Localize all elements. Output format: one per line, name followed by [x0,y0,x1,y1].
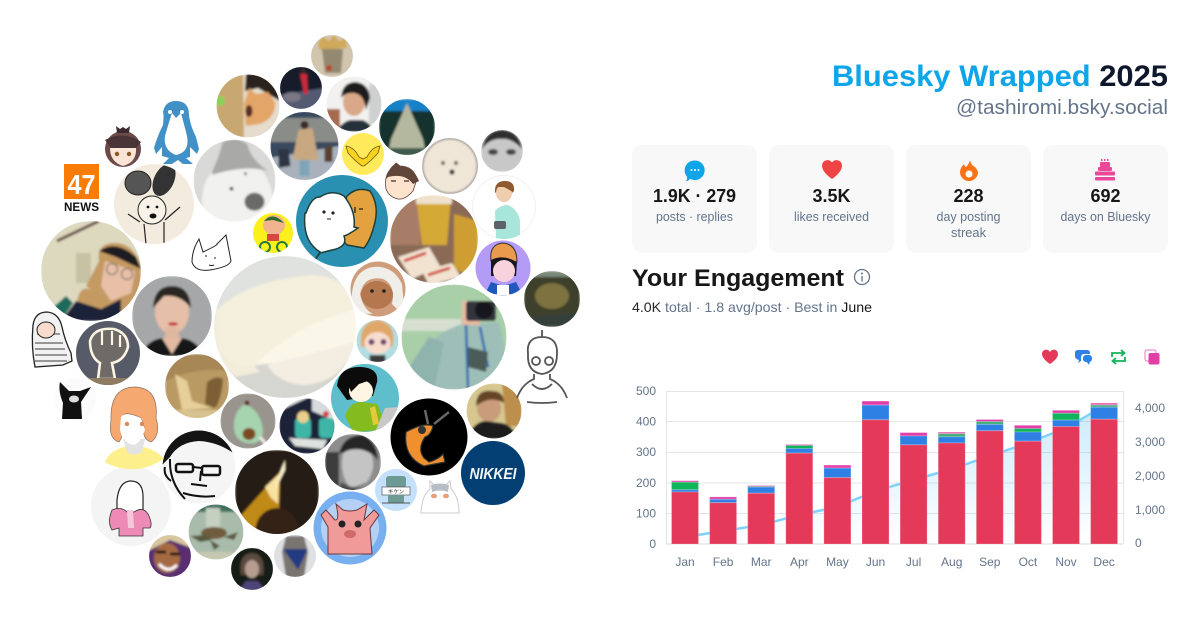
avatar cluster [32,34,580,591]
bar: Apr [786,444,813,544]
bar: Jul [900,433,927,544]
avatar: cat with scarf photo [273,534,317,578]
avatar: man photo [466,383,522,439]
left axis labels [636,384,656,551]
bar: Mar [748,486,775,544]
avatar: woman with glasses photo [41,221,141,321]
avatar: orange cap illustration [475,240,531,296]
avatar: chibi character illustration [105,126,141,167]
month labels [675,555,1115,569]
avatar: ginkgo leaf icon [342,133,384,175]
avatar: robot illustration: キケン [388,488,405,496]
avatar: hooded cat illustration [350,261,406,317]
stat card: likes [769,145,894,253]
avatar: green shirt illustration [331,364,399,432]
left axis labels: 400 [636,414,656,428]
stat label: posts · replies [656,210,733,224]
avatar: Nikkei logo: NIKKEI [470,466,517,483]
stacked bar chart [636,384,1165,569]
avatar: bear plush photo [194,139,276,222]
avatar: owl illustration [421,481,459,513]
icon: flame [960,160,978,181]
month labels: Jul [906,555,921,569]
avatar: dark hair woman photo [230,547,274,591]
heading: Your Engagement: Your Engagement [632,265,844,292]
avatar: shrimp illustration [390,398,468,476]
right axis labels [1135,401,1165,550]
bars [672,401,1118,544]
stat card: streak [906,145,1031,253]
icon: legend quotes [1145,350,1160,364]
bar: Feb [710,497,737,544]
avatar: dark stage photo [279,66,323,110]
avatar: man with glasses sketch [162,430,236,504]
avatar: cat outline drawing [192,235,231,270]
avatar: photographer photo [401,284,507,390]
month labels: Aug [941,555,962,569]
avatar: pink cat illustration [313,491,387,565]
avatar: chihuahua illustration [54,378,96,420]
avatar: knitting girl illustration [91,466,171,546]
left axis labels: 200 [636,476,656,490]
stat value: 1.9K · 279 [653,186,736,206]
logo: 47 News [64,164,99,214]
month labels: Sep [979,555,1001,569]
avatar: sea turtle photo [188,504,244,560]
month labels: Jan [675,555,695,569]
avatar: beer mugs photo [390,195,478,285]
month labels: Apr [790,555,809,569]
stat value: 228 [953,186,984,206]
month labels: Feb [713,555,734,569]
right axis labels: 0 [1135,536,1142,550]
bar: Jun [862,401,889,544]
avatar: penguin icon [154,101,199,164]
bar: May [824,465,851,544]
logo: 47 News: NEWS [64,200,99,214]
avatar: blue cats illustration [296,175,388,267]
right axis labels: 3,000 [1135,435,1165,449]
bar: Sep [976,420,1003,544]
avatar: turtle photo [524,271,580,327]
left axis labels: 500 [636,384,656,398]
avatar: sushi photo [213,255,357,399]
logo: 47 News: 47 [68,169,96,200]
avatar: baby face illustration [386,163,419,199]
avatar: robot illustration [375,469,417,511]
avatar: artist with camera illustration [472,175,536,239]
avatar: doll photo [356,319,400,363]
right axis labels: 2,000 [1135,469,1165,483]
icon: info [854,270,870,284]
icon: cake [1095,159,1115,180]
title: Bluesky Wrapped 2025 [832,60,1168,93]
left axis labels: 300 [636,445,656,459]
avatar: family walking photo [270,111,340,181]
icon: legend reposts [1112,350,1125,364]
engagement summary: 4.0K total · 1.8 avg/post · Best in June [632,299,872,315]
avatar: Nikkei logo [461,441,525,505]
avatar: avocado plush photo [220,393,276,449]
icon: legend likes [1042,350,1058,364]
avatar: black and white eyes photo [481,130,523,172]
avatar: bald man line drawing [517,330,567,403]
stat card: posts and replies [632,145,757,253]
icon: heart [822,160,842,179]
cumulative area [685,406,1104,544]
month labels: Jun [866,555,885,569]
month labels: Mar [751,555,772,569]
bar: Oct [1014,425,1041,544]
avatar: striped hoodie illustration [32,312,72,367]
stat value: 692 [1090,186,1121,206]
avatar: king illustration [310,34,354,78]
right axis labels: 1,000 [1135,503,1165,517]
left axis labels: 100 [636,506,656,520]
avatar: fist neon sign photo [76,321,140,386]
bar: Jan [672,481,698,544]
month labels: Oct [1019,555,1038,569]
avatar: orange hair woman illustration [105,387,164,469]
stat card: days [1043,145,1168,253]
avatar: man in suit photo [326,76,382,132]
month labels: May [826,555,849,569]
handle: @tashiromi.bsky.social [956,97,1168,119]
avatar: bearded man photo [148,534,192,578]
avatar: white poodle photo [422,138,478,194]
avatar: ginger cat photo [215,74,280,138]
avatar: scribble rabbit drawing [114,160,194,244]
avatar: melon soda photo [279,398,335,454]
bar: Aug [938,432,965,544]
icon: speech bubble [685,160,705,181]
chart grid and axes [666,391,1124,544]
stat label: likes received [794,210,869,224]
left axis labels: 0 [649,537,656,551]
avatar: yellow boy on bike illustration [253,213,293,253]
avatar: glowing tower photo [235,450,319,534]
avatar: woman portrait photo [132,276,212,356]
stat label: day posting [936,210,1001,224]
stat label second line: streak [951,226,987,240]
avatar: meerkats photo [165,354,229,420]
bar: Dec [1091,403,1118,544]
stat label: days on Bluesky [1060,210,1151,224]
month labels: Nov [1055,555,1077,569]
avatar: christmas tree photo [379,99,435,156]
cumulative line [685,406,1104,537]
chart legend [1042,350,1160,365]
avatar: black and white man photo [325,434,381,492]
right axis labels: 4,000 [1135,401,1165,415]
icon: legend replies [1075,350,1092,365]
month labels: Dec [1093,555,1115,569]
bar: Nov [1052,410,1080,544]
stat value: 3.5K [812,186,851,206]
